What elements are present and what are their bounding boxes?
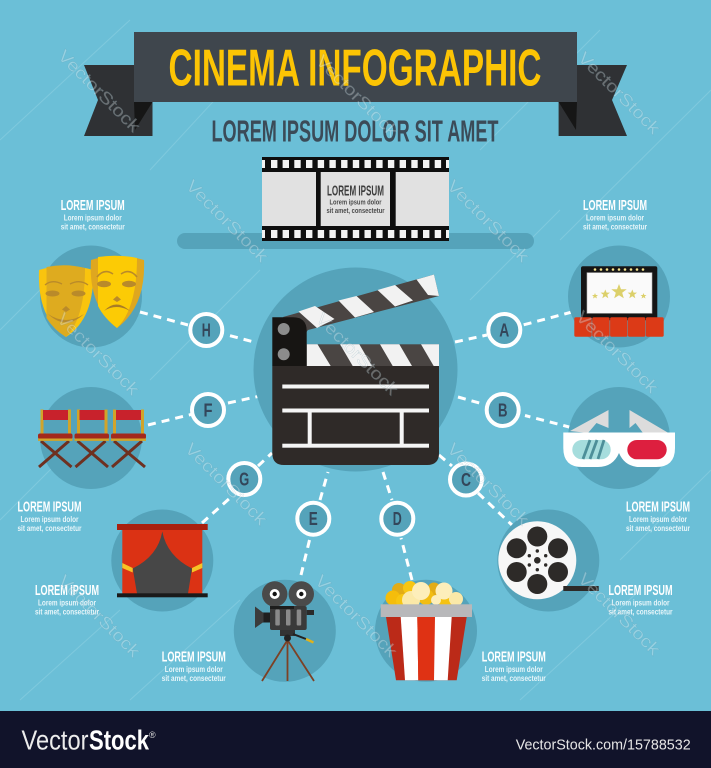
marker F: F — [204, 400, 212, 420]
title banner — [84, 32, 627, 136]
film strip panel — [262, 157, 449, 241]
text: popcorn: sit amet, consectetur — [482, 674, 546, 683]
central circle — [254, 268, 458, 472]
footer registered mark: ® — [149, 730, 156, 740]
marker F — [192, 394, 224, 426]
marker A — [488, 314, 520, 346]
text: left lower block — [35, 582, 99, 616]
text: stage: LOREM IPSUM — [18, 499, 82, 516]
watermarks — [53, 46, 664, 661]
text: masks: Lorem ipsum dolor — [64, 214, 122, 222]
text: right lower block: sit amet, consectetur — [608, 608, 672, 616]
watermarks: VectorStock — [572, 307, 662, 397]
icon: tragedy mask — [91, 256, 144, 328]
text: stage: Lorem ipsum dolor — [20, 515, 78, 524]
text: masks: sit amet, consectetur — [61, 222, 125, 232]
film strip text — [326, 184, 385, 215]
marker A: A — [499, 320, 509, 340]
marker H — [190, 314, 222, 346]
text: stage — [18, 499, 82, 533]
film strip text: Lorem ipsum dolor — [330, 198, 382, 206]
text: left lower block: LOREM IPSUM — [35, 582, 99, 599]
icon: 3D glasses — [563, 410, 675, 467]
text: right lower block — [608, 582, 672, 616]
text: cinema: sit amet, consectetur — [583, 222, 647, 232]
text: reel upper: sit amet, consectetur — [626, 524, 690, 533]
text: camera — [162, 649, 226, 683]
watermarks: VectorStock — [574, 48, 664, 138]
watermarks: VectorStock — [54, 46, 144, 136]
icon: cinema screen — [574, 266, 664, 337]
item B: 3D glasses — [487, 387, 675, 489]
watermarks: VectorStock — [53, 309, 143, 399]
text: popcorn: Lorem ipsum dolor — [485, 665, 543, 674]
watermarks: VectorStock — [311, 571, 401, 661]
item E: movie camera — [162, 503, 336, 683]
film strip text: LOREM IPSUM — [327, 184, 384, 200]
item G: stage — [18, 463, 260, 612]
banner right tail — [559, 65, 627, 136]
footer logo: Stock — [89, 724, 149, 756]
text: reel upper: Lorem ipsum dolor — [629, 515, 687, 524]
clapper lower stripe — [306, 344, 439, 366]
footer logo — [22, 724, 149, 756]
watermarks: VectorStock — [182, 176, 272, 266]
text: reel upper — [626, 499, 690, 533]
icon: popcorn bucket — [381, 581, 472, 680]
icon: camera — [255, 581, 314, 681]
footer url: VectorStock.com/15788532 — [516, 736, 691, 754]
watermarks: VectorStock — [181, 439, 271, 529]
item D: popcorn — [375, 503, 546, 683]
subtitle: LOREM IPSUM DOLOR SIT AMET — [212, 114, 499, 149]
marker G: G — [239, 470, 249, 490]
text: cinema — [583, 197, 647, 232]
film strip text: sit amet, consectetur — [326, 206, 385, 215]
marker C — [450, 464, 482, 496]
text: camera: LOREM IPSUM — [162, 649, 226, 666]
marker E — [297, 503, 329, 535]
marker E: E — [309, 509, 318, 529]
item F: director chairs — [38, 387, 224, 489]
text: camera: Lorem ipsum dolor — [165, 665, 223, 674]
footer logo: Vector — [22, 724, 88, 756]
marker B: B — [498, 400, 507, 420]
text: popcorn: LOREM IPSUM — [482, 649, 546, 666]
marker C: C — [461, 470, 471, 490]
icon: film reel — [498, 521, 599, 599]
text: cinema: Lorem ipsum dolor — [586, 214, 644, 222]
watermarks: VectorStock — [312, 309, 402, 399]
clapper hinge — [272, 317, 307, 366]
banner main ribbon — [134, 32, 577, 102]
text: right lower block: Lorem ipsum dolor — [612, 598, 670, 608]
watermarks: VectorStock — [574, 569, 664, 659]
item C: film reel — [450, 464, 690, 612]
text: cinema: LOREM IPSUM — [583, 197, 647, 214]
clapper top arm — [283, 274, 439, 340]
icon: chairs — [38, 410, 146, 467]
central clapperboard — [254, 268, 458, 472]
text: masks: LOREM IPSUM — [61, 197, 125, 214]
watermarks: VectorStock — [54, 571, 144, 661]
text: popcorn — [482, 649, 546, 683]
watermarks: VectorStock — [312, 51, 402, 141]
marker D: D — [393, 509, 402, 529]
footer bar — [0, 711, 711, 768]
marker H: H — [202, 320, 211, 340]
text: left lower block: sit amet, consectetur — [35, 608, 99, 616]
icon: comedy mask — [39, 265, 93, 337]
text: masks — [61, 197, 125, 232]
item A: cinema screen — [488, 197, 670, 348]
item H: theatre masks — [39, 197, 222, 348]
marker G — [228, 463, 260, 495]
text: stage: sit amet, consectetur — [18, 524, 82, 533]
marker D — [381, 503, 413, 535]
marker B — [487, 394, 519, 426]
connector lines — [140, 312, 572, 580]
clapper body — [272, 366, 439, 465]
icon: stage curtain — [117, 524, 208, 597]
text: left lower block: Lorem ipsum dolor — [38, 598, 96, 608]
banner left tail — [84, 65, 152, 136]
watermarks: VectorStock — [443, 439, 533, 529]
text: camera: sit amet, consectetur — [162, 674, 226, 683]
watermarks: VectorStock — [443, 176, 533, 266]
film strip shadow bar — [177, 233, 534, 249]
